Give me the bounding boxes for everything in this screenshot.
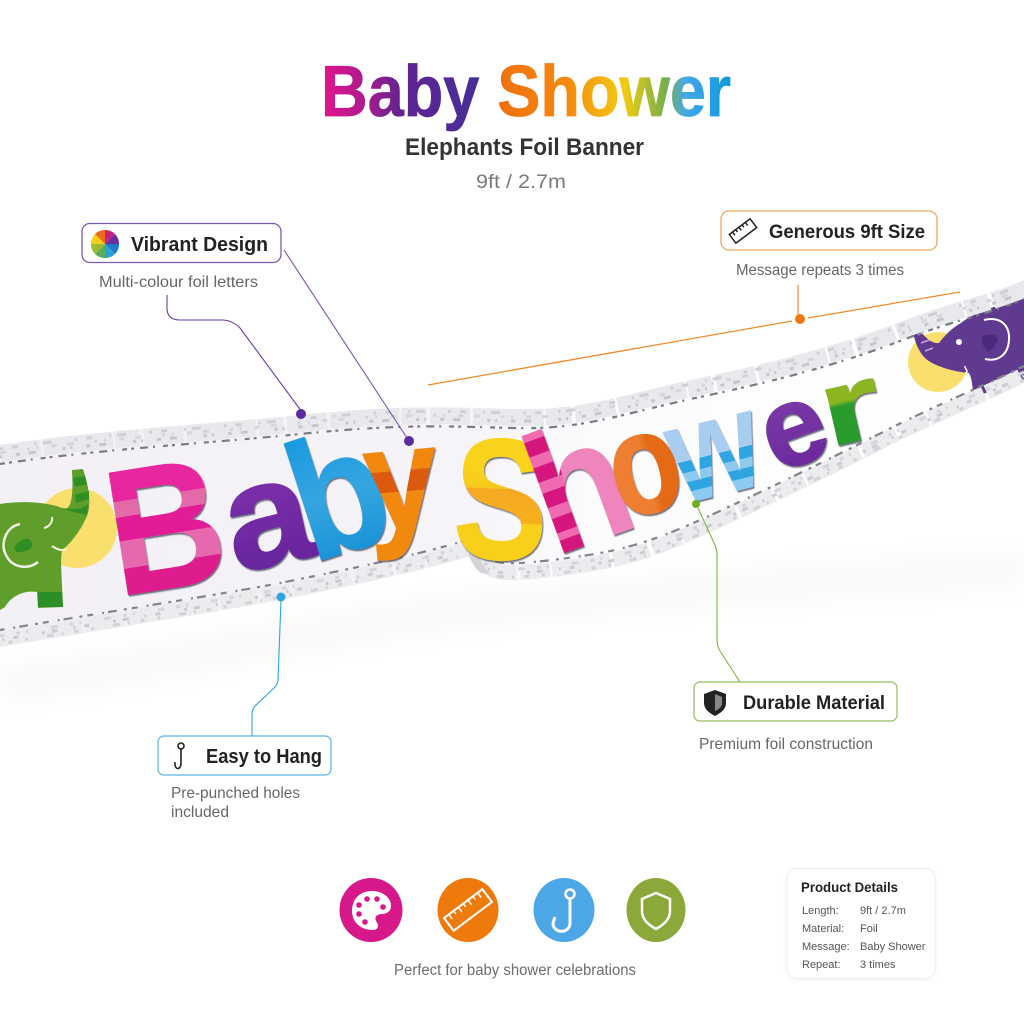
banner letters: Shower: r bbox=[807, 340, 892, 469]
panel: product details: Foil bbox=[860, 923, 878, 935]
elephant: green bbox=[0, 469, 117, 610]
icon: ruler badge bbox=[438, 878, 498, 942]
foil speckle strips bbox=[0, 280, 1024, 647]
callout: Durable Material: Durable Material bbox=[743, 692, 885, 714]
icon: hook bbox=[175, 743, 184, 769]
banner letters: Baby bbox=[93, 389, 444, 633]
icon: shield badge bbox=[626, 878, 686, 942]
panel: product details: Repeat: bbox=[802, 959, 841, 971]
fold shadow bbox=[468, 552, 490, 574]
banner letters: Shower: w bbox=[649, 358, 777, 535]
title: Baby Shower bbox=[321, 52, 731, 132]
panel: product details: 9ft / 2.7m bbox=[860, 905, 906, 917]
tagline: Perfect for baby shower celebrations bbox=[394, 962, 636, 979]
callout: Easy to Hang: Easy to Hang bbox=[206, 746, 322, 768]
icon: colour wheel bbox=[91, 230, 119, 258]
foil banner bbox=[0, 280, 1024, 647]
icon: shield bbox=[704, 690, 726, 716]
callout: Generous 9ft Size bbox=[721, 211, 937, 279]
panel: product details bbox=[787, 868, 935, 978]
callout: Easy to Hang: included bbox=[171, 804, 229, 821]
icon: palette badge bbox=[340, 878, 402, 942]
callout: Generous 9ft Size: Message repeats 3 times bbox=[736, 262, 904, 279]
banner letters: Shower bbox=[451, 340, 892, 597]
callout: Durable Material bbox=[694, 682, 897, 753]
leader: Vibrant Design to Baby bbox=[167, 250, 414, 446]
banner letters: Baby: B bbox=[93, 419, 238, 633]
panel: product details: Message: bbox=[802, 941, 850, 953]
orange span line bbox=[428, 292, 960, 385]
banner letters: Shower: h bbox=[501, 378, 655, 592]
leader: Generous 9ft Size bbox=[795, 285, 805, 324]
callout: Durable Material: Premium foil construction bbox=[699, 736, 873, 753]
icon: hook badge bbox=[534, 878, 594, 942]
leader: Easy to Hang bbox=[252, 592, 286, 736]
callout: Generous 9ft Size: Generous 9ft Size bbox=[769, 221, 925, 243]
size text: 9ft / 2.7m bbox=[476, 172, 566, 193]
banner floor shadow bbox=[0, 570, 1024, 685]
callout: Vibrant Design: Vibrant Design bbox=[131, 234, 268, 256]
panel: product details: Material: bbox=[802, 923, 844, 935]
panel: product details: Product Details bbox=[801, 879, 898, 895]
panel: product details: 3 times bbox=[860, 959, 896, 971]
banner letters: Baby: b bbox=[265, 389, 411, 597]
banner letters: Shower: o bbox=[589, 375, 697, 550]
banner letters: Baby: y bbox=[358, 395, 444, 562]
banner letters: Baby: a bbox=[206, 424, 329, 604]
banner letters: Shower: e bbox=[741, 356, 844, 496]
subtitle: Elephants Foil Banner bbox=[405, 134, 644, 161]
callout: Easy to Hang: Pre-punched holes bbox=[171, 785, 300, 802]
callout: Vibrant Design: Multi-colour foil letters bbox=[99, 274, 258, 291]
callout: Vibrant Design bbox=[82, 224, 281, 291]
panel: product details: Baby Shower bbox=[860, 941, 926, 953]
panel: product details: Length: bbox=[802, 905, 839, 917]
elephant: purple bbox=[908, 298, 1024, 397]
icon: ruler bbox=[729, 219, 757, 243]
callout: Easy to Hang bbox=[158, 736, 331, 821]
banner letters: Shower: S bbox=[451, 403, 551, 597]
title bbox=[321, 52, 731, 161]
leader: Durable Material bbox=[692, 500, 740, 682]
